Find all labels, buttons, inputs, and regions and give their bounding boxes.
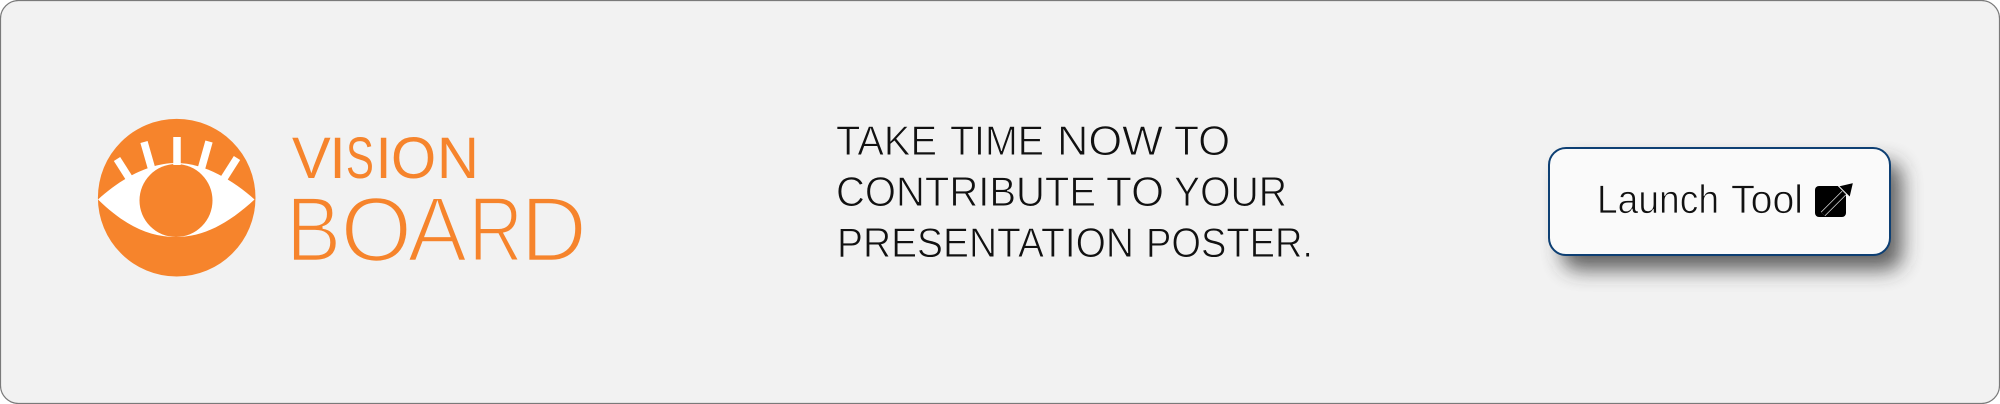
icon: eye logo (98, 119, 256, 276)
text block: tagline: TO (1106, 168, 1164, 215)
text block: tagline: PRESENTATION (837, 219, 1134, 266)
heading: vision: I (330, 126, 346, 191)
button label: Tool (1731, 178, 1803, 222)
text block: tagline: TAKE (836, 117, 937, 164)
text block: tagline: POSTER. (1146, 219, 1313, 266)
heading: board: R (468, 178, 523, 281)
button: launch tool (1549, 148, 1902, 270)
text block: tagline: TO (1174, 117, 1230, 164)
heading: board: B (286, 178, 341, 281)
heading: vision: V (292, 126, 331, 191)
heading: vision: S (346, 125, 374, 191)
button label (1597, 178, 1803, 222)
heading: board: O (340, 179, 412, 281)
heading: vision: I (376, 126, 392, 191)
text block: tagline (836, 117, 1313, 266)
text block: tagline: YOUR (1174, 168, 1287, 215)
text block: tagline: NOW (1057, 117, 1163, 164)
text block: tagline: CONTRIBUTE (836, 168, 1096, 215)
heading: board: A (408, 179, 468, 281)
heading: vision: O (391, 126, 436, 191)
heading: board (286, 178, 587, 281)
heading: vision (292, 125, 479, 191)
heading: board: D (520, 179, 587, 281)
text block: tagline: TIME (950, 117, 1044, 164)
heading: vision: N (437, 126, 479, 191)
icon: launch arrow (1815, 182, 1854, 217)
button label: Launch (1597, 178, 1719, 222)
